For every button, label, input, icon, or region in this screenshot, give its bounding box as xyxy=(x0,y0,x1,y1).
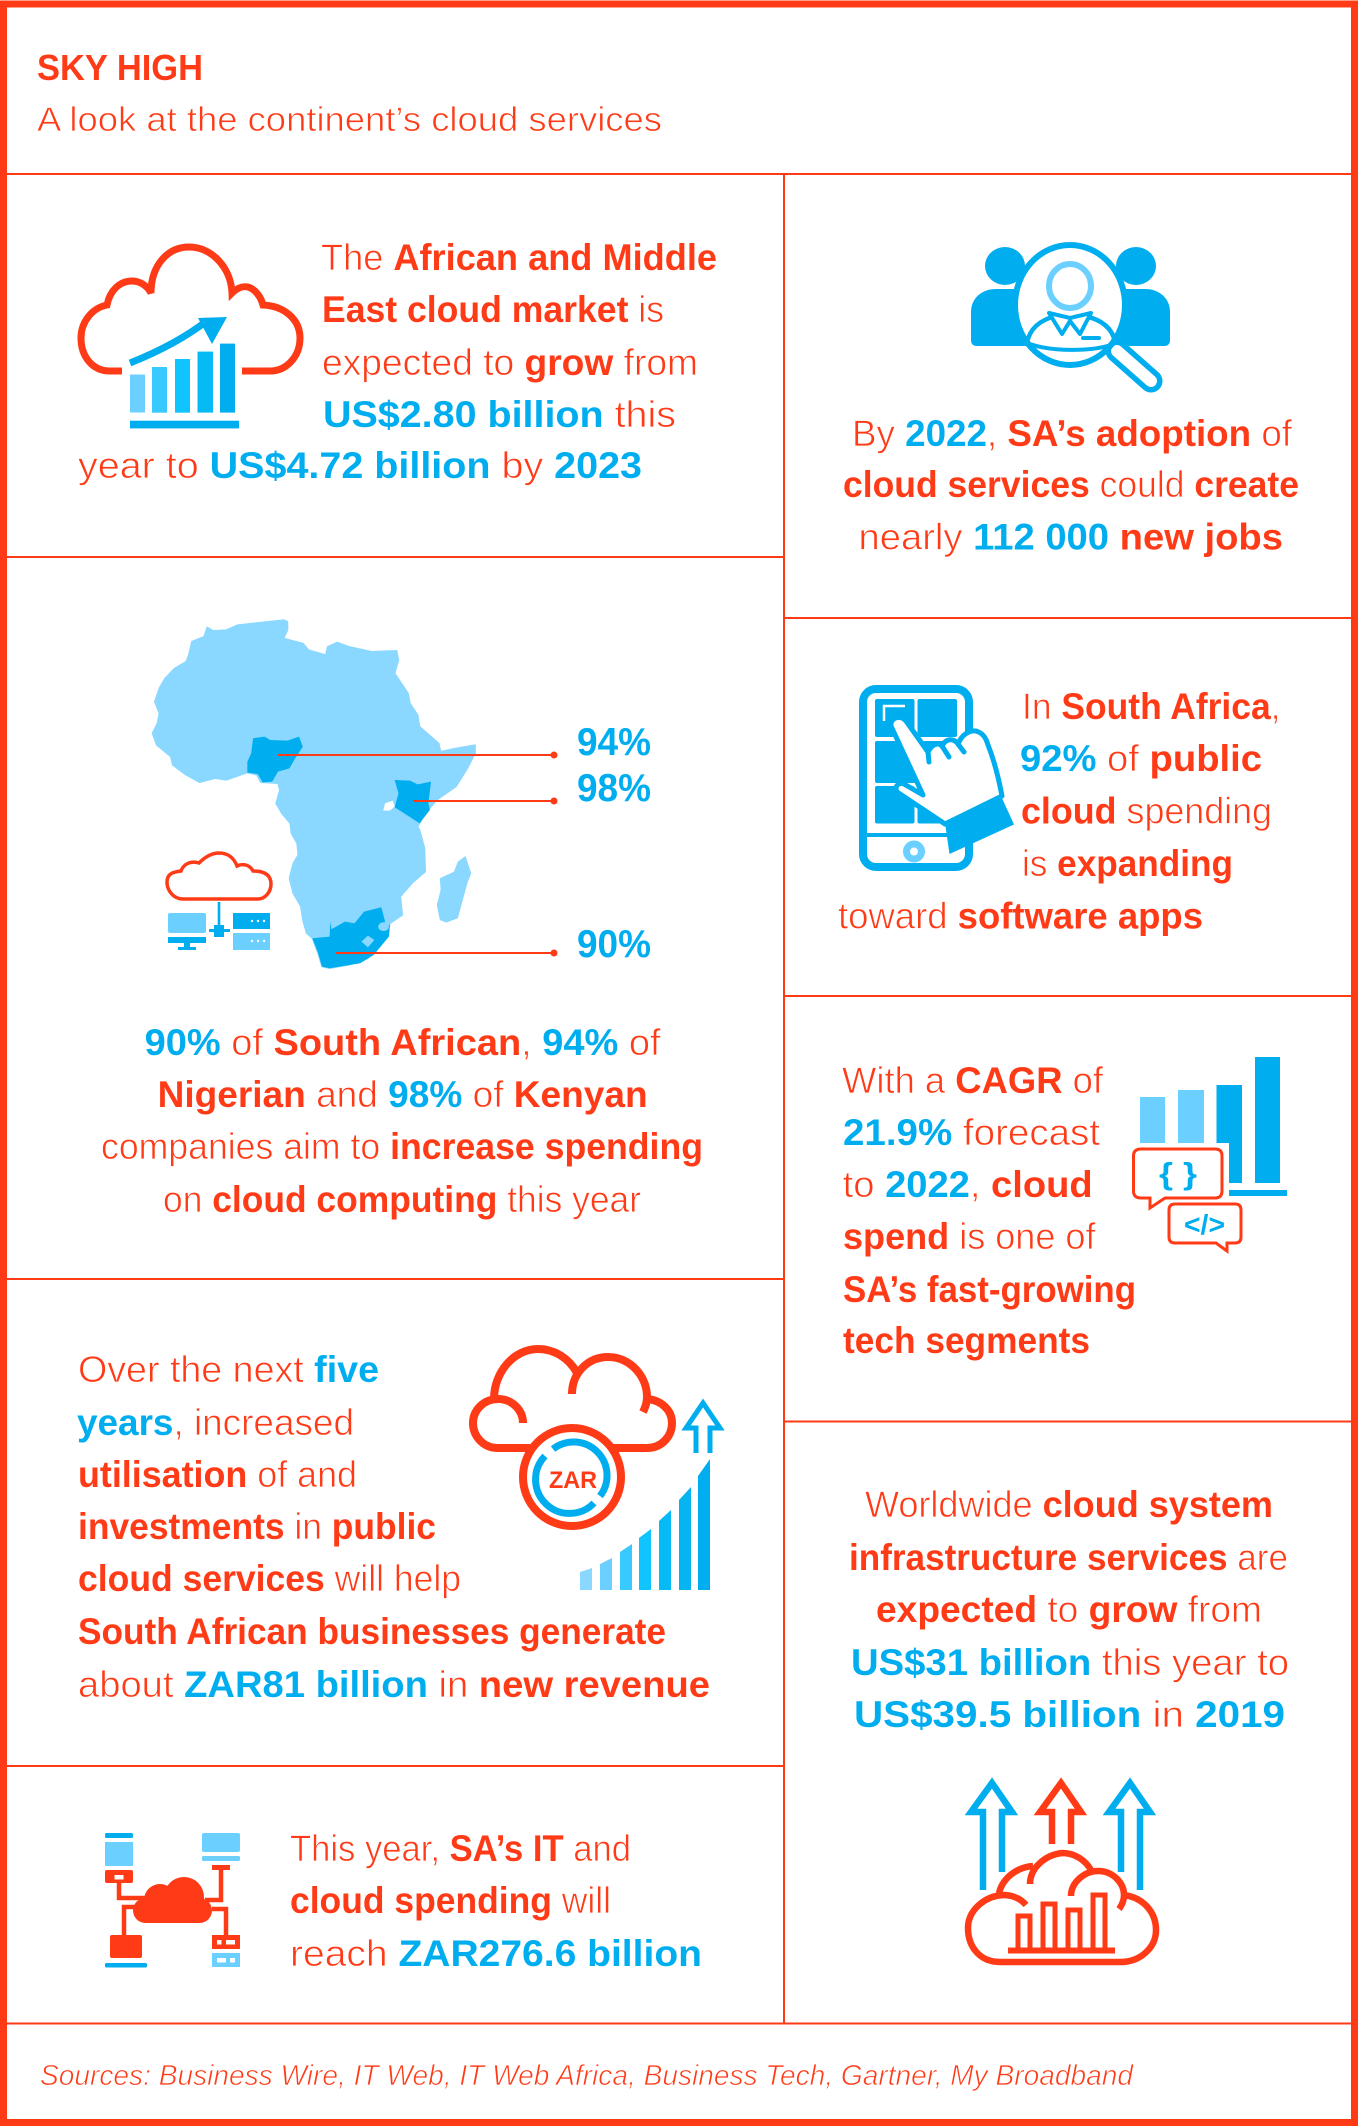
panel: worldwide infrastructure services xyxy=(849,1484,1289,1962)
icon: cloud with rising bar chart xyxy=(81,247,300,428)
text block: jobs forecast: cloud services could create xyxy=(843,464,1299,505)
text block: South Africa public cloud: is expanding xyxy=(1022,843,1233,884)
panel: public cloud investment and new revenue xyxy=(77,1349,720,1705)
text block: five-year revenue outlook: cloud services will help xyxy=(78,1558,461,1599)
text block: worldwide forecast: infrastructure services are xyxy=(849,1537,1288,1578)
text block: spending by country: Nigerian and 98% of Kenyan xyxy=(158,1074,648,1115)
panel: African and Middle East cloud market xyxy=(78,237,717,486)
icon: people under magnifying glass xyxy=(971,245,1170,381)
callout: Kenya 98% xyxy=(413,767,651,810)
text block: IT spending total: reach ZAR276.6 billion xyxy=(290,1933,702,1974)
text block: CAGR xyxy=(842,1060,1136,1361)
panel: public cloud spending on software apps xyxy=(838,686,1280,936)
callout: Nigeria 94% xyxy=(278,721,651,764)
text block: jobs forecast: By 2022, SA’s adoption of xyxy=(852,413,1293,454)
text block: CAGR: tech segments xyxy=(843,1320,1090,1361)
text block: cloud market growth: US$2.80 billion this xyxy=(323,394,676,435)
header: title and subtitle xyxy=(37,47,662,139)
text block: spending by country: on cloud computing this year xyxy=(163,1179,641,1220)
text block: worldwide forecast: US$31 billion this year to xyxy=(851,1642,1289,1683)
text block: CAGR: spend is one of xyxy=(843,1216,1096,1257)
text block: spending by country xyxy=(101,1022,703,1220)
text block: CAGR: SA’s fast-growing xyxy=(843,1269,1136,1310)
text block: five-year revenue outlook: Over the next five xyxy=(78,1349,379,1390)
text block: spending by country: 90% of South African, 94% of xyxy=(145,1022,661,1063)
icon: bar chart with code bubbles: </> xyxy=(1184,1209,1225,1240)
text block: South Africa public cloud: cloud spending xyxy=(1021,790,1272,832)
text block: five-year revenue outlook: utilisation of and xyxy=(78,1454,357,1495)
text block: five-year revenue outlook: investments in public xyxy=(78,1506,436,1547)
text block: IT spending total: cloud spending will xyxy=(290,1880,611,1921)
icon: bar chart with code bubbles: { } xyxy=(1159,1156,1197,1191)
sources footnote: Sources: Business Wire, IT Web, IT Web Africa, Business Tech, Gartner, My Broadband xyxy=(40,2060,1134,2092)
text block: South Africa public cloud: toward software apps xyxy=(838,896,1203,936)
text block: cloud market growth xyxy=(78,237,717,486)
map: Africa with highlighted countries xyxy=(152,620,475,968)
text block: South Africa public cloud: 92% of public xyxy=(1020,738,1262,779)
icon: cloud with bars and three arrows xyxy=(968,1783,1156,1962)
text block: South Africa public cloud: In South Africa, xyxy=(1022,686,1280,727)
callout: South Africa 90% xyxy=(336,923,651,966)
text block: IT spending total: This year, SA’s IT and xyxy=(290,1828,631,1869)
text block: jobs forecast: nearly 112 000 new jobs xyxy=(858,516,1283,558)
text block: worldwide forecast: Worldwide cloud system xyxy=(865,1484,1273,1525)
icon: cloud with computer and server xyxy=(167,853,271,950)
icon: ZAR cloud with rising bars: ZAR xyxy=(549,1467,597,1494)
text block: five-year revenue outlook: South African businesses generate xyxy=(78,1611,666,1652)
text block: jobs forecast xyxy=(843,413,1299,558)
icon: bar chart with code bubbles xyxy=(1134,1057,1287,1251)
callout: South Africa 90%: 90% xyxy=(577,923,651,966)
text block: CAGR: 21.9% forecast xyxy=(843,1112,1101,1153)
callout: Nigeria 94%: 94% xyxy=(577,721,651,764)
text block: IT spending total xyxy=(290,1828,702,1974)
panel: IT and cloud spending xyxy=(105,1828,702,1974)
text block: cloud market growth: The African and Middle xyxy=(321,237,717,278)
text block: CAGR: With a CAGR of xyxy=(842,1060,1104,1101)
text block: cloud market growth: year to US$4.72 billion by 2023 xyxy=(78,445,642,486)
text block: CAGR: to 2022, cloud xyxy=(843,1164,1093,1205)
text block: spending by country: companies aim to increase spending xyxy=(101,1126,703,1167)
text block: cloud market growth: East cloud market is xyxy=(322,289,664,330)
text block: five-year revenue outlook: years, increased xyxy=(77,1402,354,1443)
text block: worldwide forecast: US$39.5 billion in 2019 xyxy=(854,1694,1285,1735)
text block: worldwide forecast xyxy=(849,1484,1289,1735)
title: SKY HIGH xyxy=(37,47,203,88)
icon: hand tapping smartphone xyxy=(863,689,1014,867)
panel: new jobs xyxy=(843,245,1299,558)
text block: five-year revenue outlook: about ZAR81 billion in new revenue xyxy=(78,1664,710,1705)
text block: South Africa public cloud xyxy=(838,686,1280,936)
panel: CAGR forecast xyxy=(842,1057,1287,1361)
panel: Africa map xyxy=(101,620,703,1220)
callout: Kenya 98%: 98% xyxy=(577,767,651,810)
icon: ZAR cloud with rising bars xyxy=(473,1349,720,1590)
icon: cloud network xyxy=(105,1833,240,1968)
text block: worldwide forecast: expected to grow from xyxy=(876,1589,1262,1630)
subtitle: A look at the continent’s cloud services xyxy=(37,101,662,139)
text block: five-year revenue outlook xyxy=(77,1349,710,1705)
text block: cloud market growth: expected to grow from xyxy=(322,342,698,383)
